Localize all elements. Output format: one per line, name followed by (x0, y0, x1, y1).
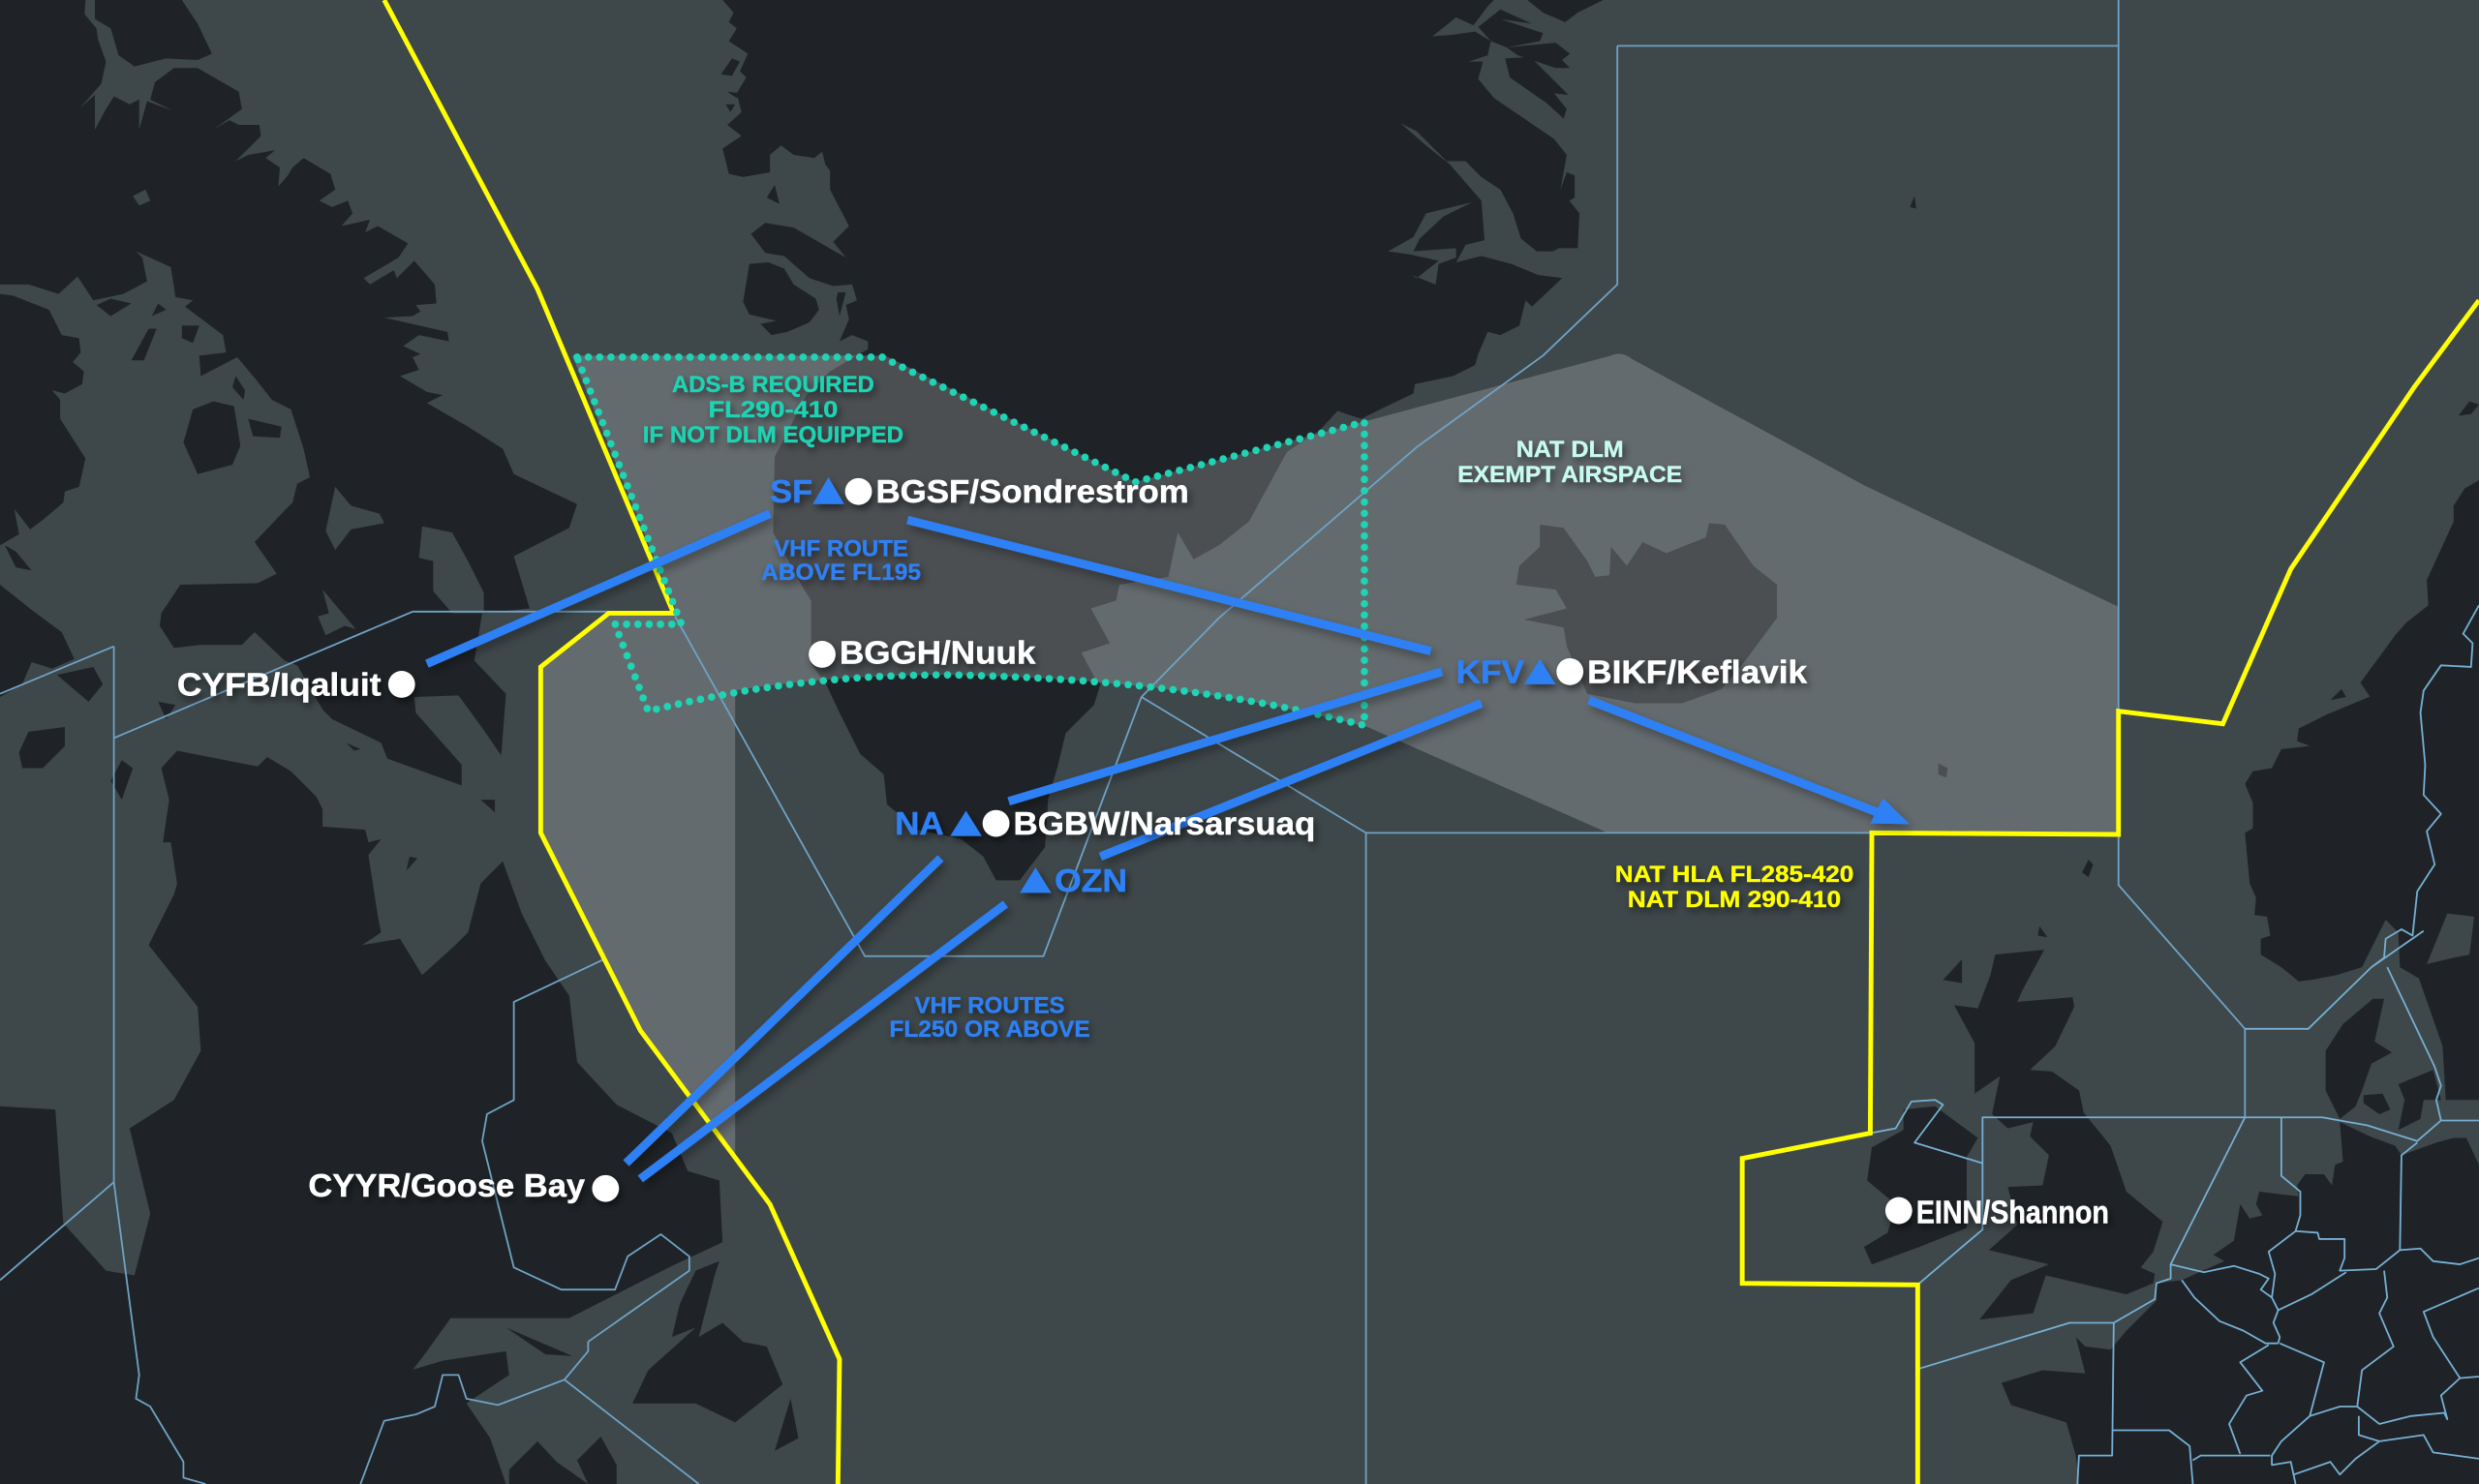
land: Greenland (722, 0, 1579, 880)
note: NAT DLM exempt airspace (1457, 437, 1682, 488)
land: Scandinavia (2245, 480, 2479, 1100)
identifier: KFV: KFV (1456, 654, 1525, 690)
label: Nuuk: BGGH/Nuuk (840, 636, 1036, 672)
land: Iceland (1516, 523, 1777, 704)
identifier: NA: NA (895, 806, 944, 842)
note: NAT DLM exempt airspace: EXEMPT AIRSPACE (1457, 462, 1682, 488)
note: NAT HLA and DLM levels: NAT DLM 290-410 (1628, 887, 1841, 913)
land: Hebrides (1943, 959, 1962, 983)
note: ADS-B required: IF NOT DLM EQUIPPED (643, 422, 903, 448)
shaded NAT DLM exempt airspace (540, 353, 2119, 1162)
note: VHF routes FL250 or above: FL250 OR ABOVE (889, 1016, 1090, 1043)
land: Newfoundland and maritime islands (505, 1261, 799, 1484)
note: NAT DLM exempt airspace: NAT DLM (1516, 437, 1624, 463)
label: Goose Bay: CYYR/Goose Bay (308, 1168, 586, 1204)
VOR identifiers (770, 474, 1525, 899)
note: NAT HLA and DLM levels: NAT HLA FL285-420 (1615, 862, 1853, 888)
yellow NAT HLA boundary: west (384, 0, 840, 1484)
label: Narsarsuaq: BGBW/Narsarsuaq (1014, 806, 1315, 842)
label: Shannon: EINN/Shannon (1916, 1196, 2109, 1231)
identifier: SF: SF (770, 474, 812, 510)
land: western islands (0, 545, 495, 871)
dotted ADS-B required boundary (577, 357, 1364, 725)
note: VHF routes FL250 or above: VHF ROUTES (915, 992, 1065, 1018)
label: Iqaluit: CYFB/Iqaluit (177, 667, 382, 703)
note: VHF route above FL195: ABOVE FL195 (761, 560, 921, 586)
land: Ireland (1864, 1106, 1977, 1264)
land: Melville peninsula (0, 294, 85, 545)
label: Keflavik: BIKF/Keflavik (1587, 654, 1808, 690)
identifier: OZN: OZN (1055, 863, 1127, 899)
airport markers (388, 478, 1913, 1224)
land: Faroe, Shetland and Atlantic islets (1910, 196, 2479, 937)
sea inlets cut into land (133, 123, 1597, 635)
land: Foxe Basin islands (97, 299, 282, 474)
label: Sondrestrom: BGSF/Sondrestrom (876, 474, 1189, 510)
land: Quebec and Labrador (0, 750, 722, 1484)
land: Great Britain (1954, 950, 2162, 1319)
blue VHF route lines (427, 514, 1910, 1179)
note: VHF routes FL250 or above (889, 992, 1090, 1043)
land: Denmark and Baltic islands (2326, 999, 2441, 1130)
VOR triangles (812, 477, 1556, 893)
yellow NAT HLA boundary: east (1742, 300, 2479, 1484)
note: ADS-B required: ADS-B REQUIRED (672, 372, 874, 398)
land: Greenland east coast islands (1479, 0, 1603, 202)
sea inlet in southern Sweden (2427, 914, 2474, 964)
land: Baffin Island and northern Canada (0, 0, 577, 785)
land: continental Europe (2002, 1122, 2479, 1484)
note: ADS-B required (643, 372, 903, 448)
arrowhead toward Shannon (1870, 798, 1910, 824)
note: VHF route above FL195: VHF ROUTE (774, 536, 908, 562)
note: NAT HLA and DLM levels (1615, 862, 1853, 913)
land: Greenland west coast islands (721, 58, 852, 335)
note: VHF route above FL195 (761, 536, 921, 586)
airport labels (177, 474, 2109, 1231)
note: ADS-B required: FL290-410 (708, 397, 838, 423)
land: Ellesmere island (95, 0, 212, 67)
